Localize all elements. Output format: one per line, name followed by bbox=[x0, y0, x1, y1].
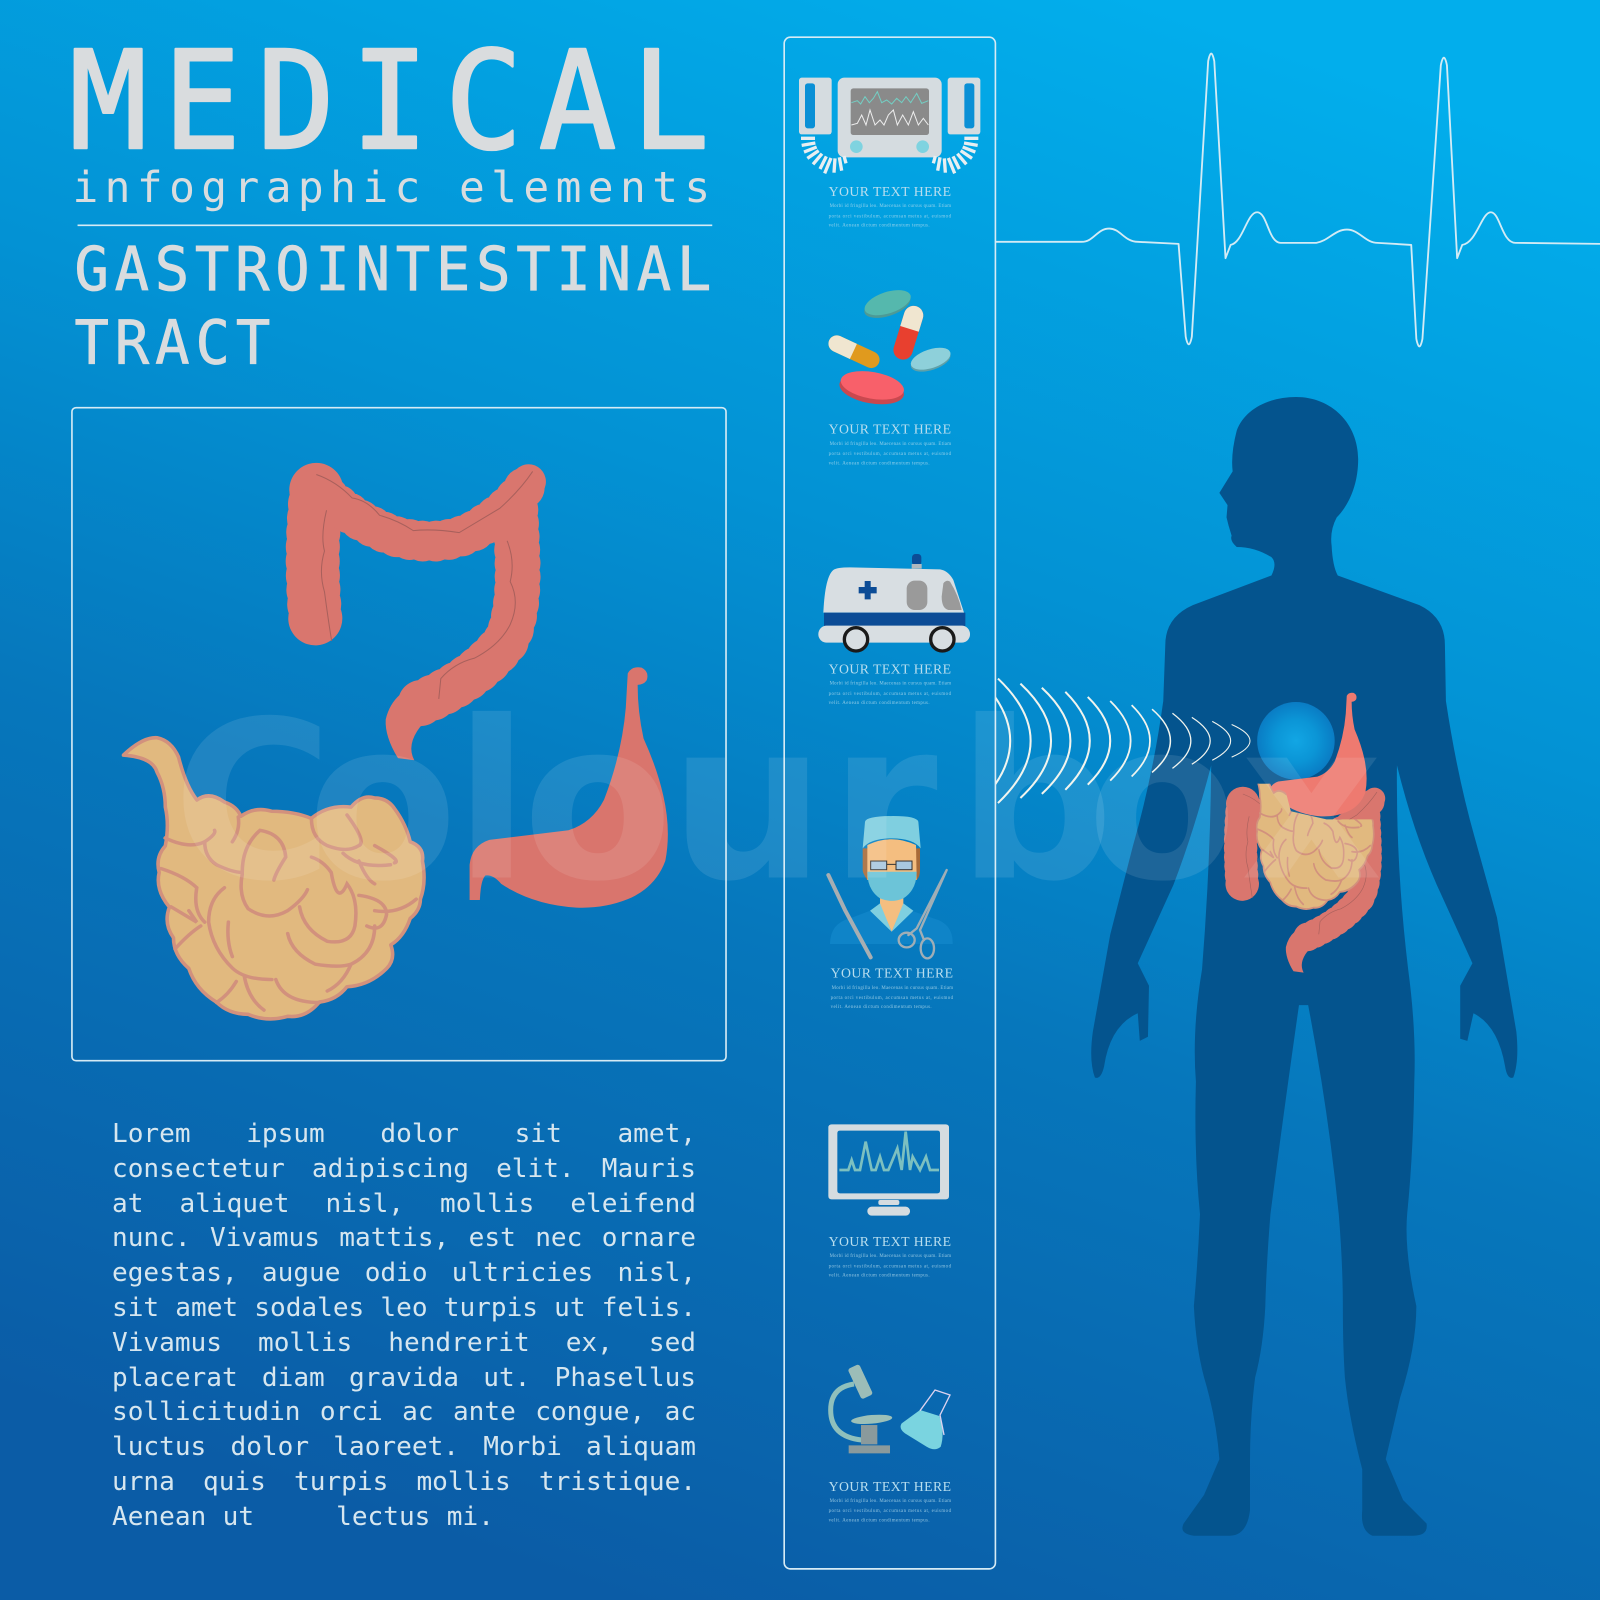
signal wave arcs bbox=[996, 678, 1250, 804]
organ: small intestine in body bbox=[1256, 784, 1374, 910]
human silhouette bbox=[1091, 397, 1517, 1536]
caption: ambulance: porta orci vestibulum, accumsan metus at, euismod bbox=[829, 692, 952, 697]
title: medical: MEDICAL bbox=[69, 23, 709, 181]
caption: microscope: porta orci vestibulum, accumsan metus at, euismod bbox=[829, 1509, 952, 1514]
caption: pills bbox=[829, 422, 952, 466]
body text block: Aenean ut lectus mi. bbox=[112, 1502, 494, 1532]
body text block: at aliquet nisl, mollis eleifend bbox=[112, 1189, 696, 1219]
caption: surgeon: Morbi id fringilla leo. Maecenas in cursus quam. Etiam bbox=[832, 986, 953, 991]
caption: defibrillator bbox=[829, 184, 952, 229]
caption: ambulance bbox=[829, 661, 952, 706]
body text block: consectetur adipiscing elit. Mauris bbox=[112, 1154, 696, 1184]
organ: stomach large bbox=[470, 667, 668, 908]
caption: defibrillator: YOUR TEXT HERE bbox=[829, 184, 951, 199]
caption: ambulance: Morbi id fringilla leo. Maecenas in cursus quam. Etiam bbox=[830, 682, 951, 687]
caption: microscope: Morbi id fringilla leo. Maecenas in cursus quam. Etiam bbox=[830, 1499, 951, 1504]
body text block: sollicitudin orci ac ante congue, ac bbox=[112, 1397, 696, 1427]
icon: ambulance bbox=[818, 554, 970, 651]
caption: monitor: YOUR TEXT HERE bbox=[829, 1234, 951, 1249]
caption: pills: velit. Aenean dictum condimentum tempus. bbox=[829, 461, 930, 466]
body text block: luctus dolor laoreet. Morbi aliquam bbox=[112, 1432, 696, 1462]
caption: surgeon: porta orci vestibulum, accumsan metus at, euismod bbox=[831, 996, 954, 1001]
caption: microscope: velit. Aenean dictum condimentum tempus. bbox=[829, 1518, 930, 1523]
heading: gastrointestinal: GASTROINTESTINAL bbox=[74, 234, 711, 304]
scan circle bbox=[1257, 702, 1335, 780]
caption: monitor: Morbi id fringilla leo. Maecenas in cursus quam. Etiam bbox=[830, 1254, 951, 1259]
organ: colon in body bbox=[1241, 792, 1377, 973]
icon: microscope and flask bbox=[831, 1364, 950, 1453]
caption: surgeon: YOUR TEXT HERE bbox=[831, 966, 953, 981]
organ: colon large bbox=[313, 471, 533, 760]
title block bbox=[69, 23, 711, 378]
watermark: Colourbox bbox=[172, 674, 1382, 930]
subtitle: infographic elements bbox=[72, 163, 710, 213]
caption: pills: porta orci vestibulum, accumsan metus at, euismod bbox=[829, 452, 952, 457]
panel: organ box bbox=[72, 408, 726, 1061]
organ: small intestine large bbox=[123, 738, 424, 1019]
caption: monitor: velit. Aenean dictum condimentum tempus. bbox=[829, 1274, 930, 1279]
caption: microscope bbox=[829, 1479, 952, 1523]
body text block: egestas, augue odio ultricies nisl, bbox=[112, 1258, 696, 1288]
organ: stomach in body bbox=[1268, 693, 1367, 816]
caption: monitor: porta orci vestibulum, accumsan metus at, euismod bbox=[829, 1264, 952, 1269]
caption: microscope: YOUR TEXT HERE bbox=[829, 1479, 951, 1494]
panel: icon column bbox=[784, 37, 995, 1569]
caption: pills: Morbi id fringilla leo. Maecenas in cursus quam. Etiam bbox=[830, 442, 951, 447]
body text block bbox=[112, 1119, 696, 1532]
body text block: urna quis turpis mollis tristique. bbox=[112, 1467, 696, 1497]
caption: surgeon: velit. Aenean dictum condimentum tempus. bbox=[831, 1005, 932, 1010]
caption: ambulance: YOUR TEXT HERE bbox=[829, 661, 951, 676]
icon: defibrillator bbox=[799, 78, 980, 173]
body text block: Vivamus mollis hendrerit ex, sed bbox=[112, 1328, 696, 1358]
icon: surgeon bbox=[828, 816, 953, 958]
caption: defibrillator: velit. Aenean dictum condimentum tempus. bbox=[829, 224, 930, 229]
caption: defibrillator: Morbi id fringilla leo. Maecenas in cursus quam. Etiam bbox=[830, 204, 951, 209]
icon: pills bbox=[826, 285, 953, 409]
caption: defibrillator: porta orci vestibulum, accumsan metus at, euismod bbox=[829, 214, 952, 219]
caption: pills: YOUR TEXT HERE bbox=[829, 422, 951, 437]
heading: tract: TRACT bbox=[74, 308, 270, 378]
body text block: Lorem ipsum dolor sit amet, bbox=[112, 1119, 696, 1149]
body text block: nunc. Vivamus mattis, est nec ornare bbox=[112, 1223, 696, 1253]
caption: surgeon bbox=[831, 966, 954, 1010]
icon: monitor bbox=[828, 1124, 949, 1216]
ecg line bbox=[996, 54, 1600, 346]
organs in body bbox=[1241, 693, 1377, 973]
body text block: placerat diam gravida ut. Phasellus bbox=[112, 1363, 696, 1393]
body text block: sit amet sodales leo turpis ut felis. bbox=[112, 1293, 696, 1323]
caption: monitor bbox=[829, 1234, 952, 1279]
title divider bbox=[78, 224, 712, 226]
caption: ambulance: velit. Aenean dictum condimentum tempus. bbox=[829, 701, 930, 706]
